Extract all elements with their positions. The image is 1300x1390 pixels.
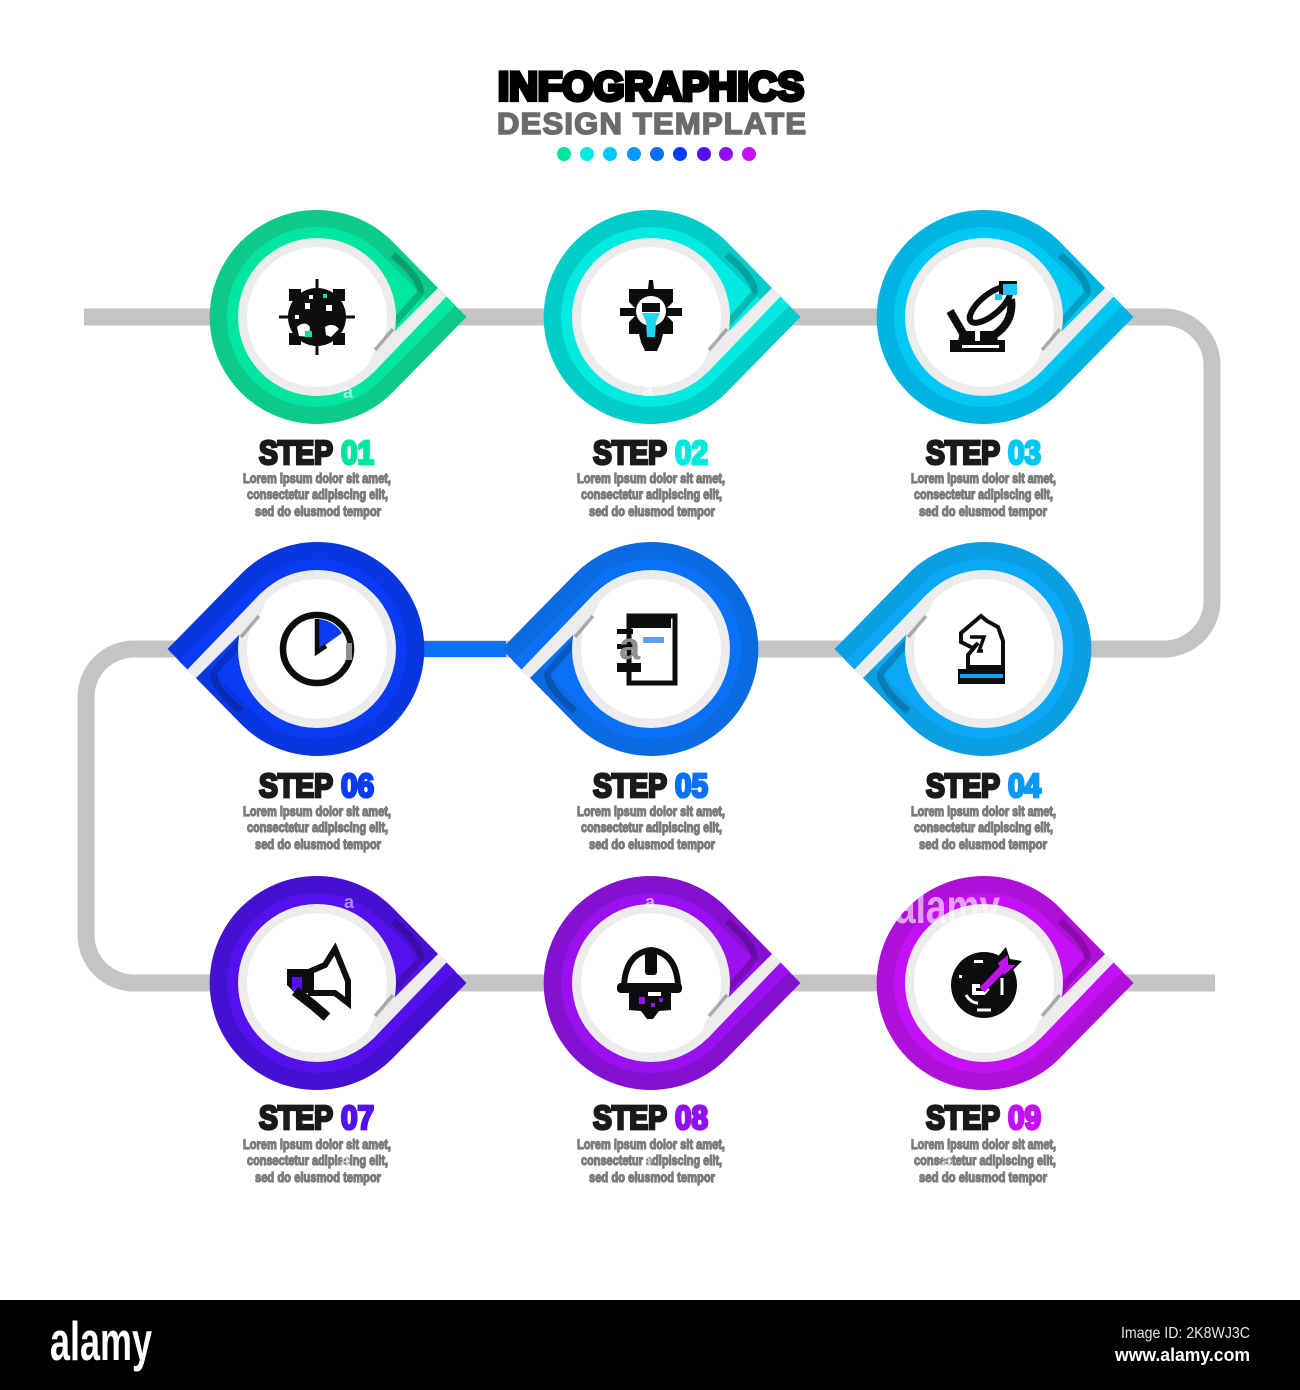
step 9 label: STEP xyxy=(926,1099,1000,1136)
step 1 label: sed do eiusmod tempor xyxy=(255,504,382,519)
connector line xyxy=(84,317,1215,983)
step 7 label: STEP xyxy=(259,1099,333,1136)
faint watermark: a xyxy=(343,382,354,402)
step 4 label: 04 xyxy=(1008,767,1042,804)
step 1 label: Lorem ipsum dolor sit amet, xyxy=(243,471,391,486)
footer image id: Image ID: 2K8WJ3C xyxy=(1121,1325,1250,1342)
title: DESIGN TEMPLATE xyxy=(497,106,806,141)
step 9 marker xyxy=(877,876,1134,1090)
step 4 label: STEP xyxy=(926,767,1000,804)
icon: clock xyxy=(283,615,352,683)
step 1 label: consectetur adipiscing elit, xyxy=(247,487,388,502)
step 6 label: sed do eiusmod tempor xyxy=(255,837,382,852)
faint watermark: a xyxy=(344,892,355,912)
step 8 label: sed do eiusmod tempor xyxy=(589,1170,716,1185)
faint watermark: a xyxy=(643,380,654,400)
faint watermark xyxy=(340,380,1000,1172)
step 6 label: consectetur adipiscing elit, xyxy=(247,820,388,835)
step 4 label: sed do eiusmod tempor xyxy=(919,837,1048,852)
step 7 label: consectetur adipiscing elit, xyxy=(247,1153,388,1168)
footer url: www.alamy.com xyxy=(1114,1345,1250,1365)
step 9 label: sed do eiusmod tempor xyxy=(919,1170,1048,1185)
step 1 marker xyxy=(210,210,466,424)
step 9 label: 09 xyxy=(1008,1099,1041,1136)
step 7 label xyxy=(243,1099,391,1185)
step 5 label: Lorem ipsum dolor sit amet, xyxy=(577,804,725,819)
blue connector segment xyxy=(420,641,506,657)
icon: microscope xyxy=(950,281,1017,352)
step 1 label xyxy=(243,434,391,519)
step 4 label xyxy=(911,767,1056,852)
step 5 marker xyxy=(502,542,758,756)
step 3 label: consectetur adipiscing elit, xyxy=(914,487,1053,502)
step 8 label: Lorem ipsum dolor sit amet, xyxy=(577,1137,725,1152)
step 4 label: consectetur adipiscing elit, xyxy=(914,820,1053,835)
faint watermark: a xyxy=(642,1151,653,1171)
step 3 label: Lorem ipsum dolor sit amet, xyxy=(911,471,1056,486)
step 5 label xyxy=(577,767,725,852)
step 6 marker xyxy=(167,542,424,756)
step 8 marker xyxy=(544,876,800,1090)
step 3 label xyxy=(911,434,1056,519)
title colour dots xyxy=(557,147,756,161)
step 6 label: STEP xyxy=(259,767,333,804)
step 4 marker xyxy=(834,542,1091,756)
step 3 label: 03 xyxy=(1008,434,1041,471)
step 5 label: sed do eiusmod tempor xyxy=(589,837,716,852)
step 3 label: STEP xyxy=(926,434,1000,471)
step 9 label xyxy=(911,1099,1056,1185)
step 6 label: Lorem ipsum dolor sit amet, xyxy=(243,804,391,819)
step 5 label: STEP xyxy=(593,767,667,804)
step 6 label xyxy=(243,767,391,852)
step 9 label: Lorem ipsum dolor sit amet, xyxy=(911,1137,1056,1152)
footer logo: alamy xyxy=(50,1310,152,1372)
faint watermark: a xyxy=(645,892,656,912)
step 3 marker xyxy=(877,210,1134,424)
step 8 label xyxy=(577,1099,725,1185)
icon: notebook: a xyxy=(619,626,641,668)
title xyxy=(497,65,806,141)
step 2 label: 02 xyxy=(675,434,708,471)
step 9 label: consectetur adipiscing elit, xyxy=(914,1153,1056,1168)
step 2 label xyxy=(577,434,725,519)
icon: target with arrow xyxy=(951,947,1022,1018)
step 7 label: sed do eiusmod tempor xyxy=(255,1170,382,1185)
footer bar xyxy=(0,1300,1300,1390)
step 2 marker xyxy=(544,210,800,424)
step 7 label: Lorem ipsum dolor sit amet, xyxy=(243,1137,391,1152)
faint watermark: a xyxy=(941,1150,953,1172)
step 7 marker xyxy=(210,876,466,1090)
step 2 label: consectetur adipiscing elit, xyxy=(581,487,722,502)
title: INFOGRAPHICS xyxy=(498,65,804,109)
faint watermark: alamy xyxy=(895,881,1000,934)
step 5 label: 05 xyxy=(675,767,708,804)
step 8 label: STEP xyxy=(593,1099,667,1136)
step 1 label: STEP xyxy=(259,434,333,471)
step 7 label: 07 xyxy=(341,1099,374,1136)
step 6 label: 06 xyxy=(341,767,374,804)
icon: light bulb in gear xyxy=(620,280,682,351)
step 5 label: consectetur adipiscing elit, xyxy=(581,820,722,835)
step 1 label: 01 xyxy=(341,434,374,471)
step 8 label: consectetur adipiscing elit, xyxy=(581,1153,722,1168)
icon: megaphone xyxy=(287,949,348,1017)
icon: hard hat xyxy=(617,950,682,1019)
step 2 label: sed do eiusmod tempor xyxy=(589,504,716,519)
step 8 label: 08 xyxy=(675,1099,708,1136)
step 2 label: STEP xyxy=(593,434,667,471)
icon: gear bug xyxy=(279,279,355,355)
faint watermark: a xyxy=(340,1151,351,1171)
step 3 label: sed do eiusmod tempor xyxy=(919,504,1048,519)
icon: notebook xyxy=(617,615,675,683)
step 4 label: Lorem ipsum dolor sit amet, xyxy=(911,804,1056,819)
icon: chess knight xyxy=(958,616,1005,684)
step 2 label: Lorem ipsum dolor sit amet, xyxy=(577,471,725,486)
